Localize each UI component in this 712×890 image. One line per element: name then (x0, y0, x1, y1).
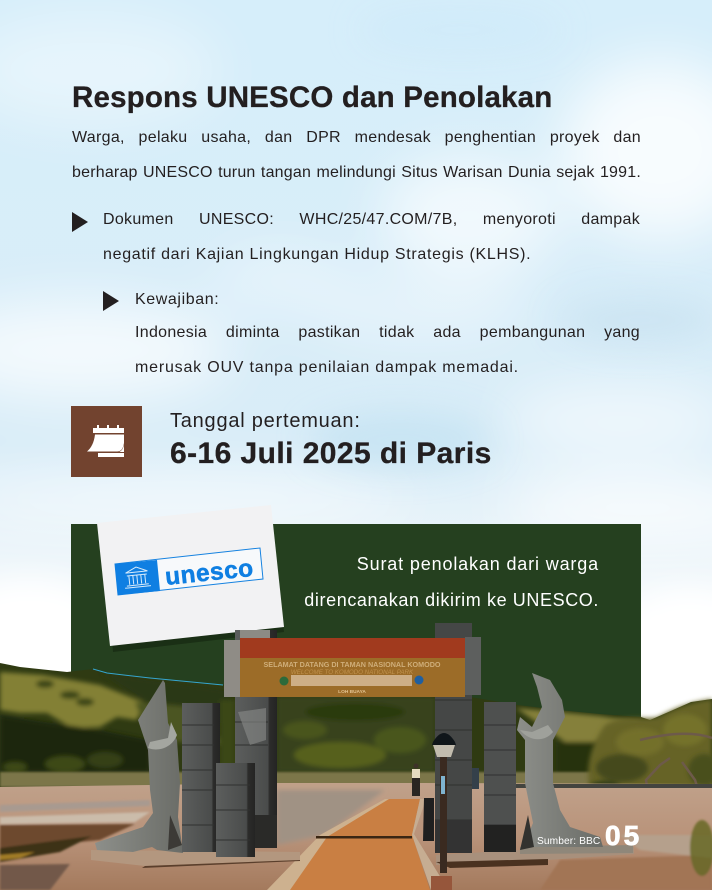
title: Respons UNESCO dan Penolakan (72, 81, 552, 114)
intro text block: Warga, pelaku usaha, dan DPR mendesak penghentian proyek dan (72, 129, 641, 146)
UNESCO logo (115, 548, 263, 595)
source credit: Sumber: BBC (537, 836, 600, 847)
sub-bullet text (135, 291, 640, 376)
UNESCO logo: unesco (164, 555, 255, 591)
intro text block: berharap UNESCO turun tangan melindungi Situs Warisan Dunia sejak 1991. (72, 164, 641, 181)
meeting date callout (71, 406, 492, 477)
icon: komodo statue right (517, 673, 603, 850)
ground (0, 783, 712, 890)
icon: calendar (71, 406, 142, 477)
sub-bullet text: Kewajiban: (135, 291, 219, 308)
gate: back pillars (224, 623, 481, 853)
bullet text: Dokumen UNESCO: WHC/25/47.COM/7B, menyoroti dampak (103, 211, 640, 228)
sub-bullet: obligation (103, 291, 640, 376)
lamp post (431, 733, 456, 890)
bullet text: negatif dari Kajian Lingkungan Hidup Strategis (KLHS). (103, 246, 531, 263)
people (412, 764, 479, 796)
fringe along hill edge (93, 669, 223, 685)
sign: welcome to Komodo National Park: SELAMAT DATANG DI TAMAN NASIONAL KOMODO (263, 660, 441, 669)
icon: komodo statue left (95, 680, 183, 853)
panel text: Surat penolakan dari warga (357, 554, 599, 574)
photo: Komodo National Park gate and landscape (0, 548, 712, 890)
bullet text (103, 211, 640, 263)
panel text (304, 554, 599, 610)
icon: triangle bullet (72, 212, 88, 232)
sign: welcome to Komodo National Park: WELCOME TO KOMODO NATIONAL PARK (291, 669, 414, 676)
date label: Tanggal pertemuan: (170, 410, 361, 432)
platforms (91, 845, 634, 868)
walkway (267, 798, 441, 890)
icon: triangle sub-bullet (103, 291, 119, 311)
gate: front pillars (182, 702, 516, 857)
date value: 6-16 Juli 2025 di Paris (170, 437, 492, 470)
hills (0, 660, 712, 790)
sub-bullet text: Indonesia diminta pastikan tidak ada pembangunan yang (135, 324, 640, 341)
bullet: UNESCO document (72, 211, 640, 263)
panel: green letter notice (71, 524, 641, 724)
card: UNESCO logo (97, 506, 284, 652)
trees right (588, 699, 712, 805)
intro text block (72, 129, 641, 181)
sign: welcome to Komodo National Park (240, 638, 465, 697)
sub-bullet text: merusak OUV tanpa penilaian dampak memadai. (135, 359, 519, 376)
page number: 05 (605, 820, 642, 851)
sign: welcome to Komodo National Park: LOH BUAYA (338, 689, 366, 695)
panel text: direncanakan dikirim ke UNESCO. (304, 590, 599, 610)
